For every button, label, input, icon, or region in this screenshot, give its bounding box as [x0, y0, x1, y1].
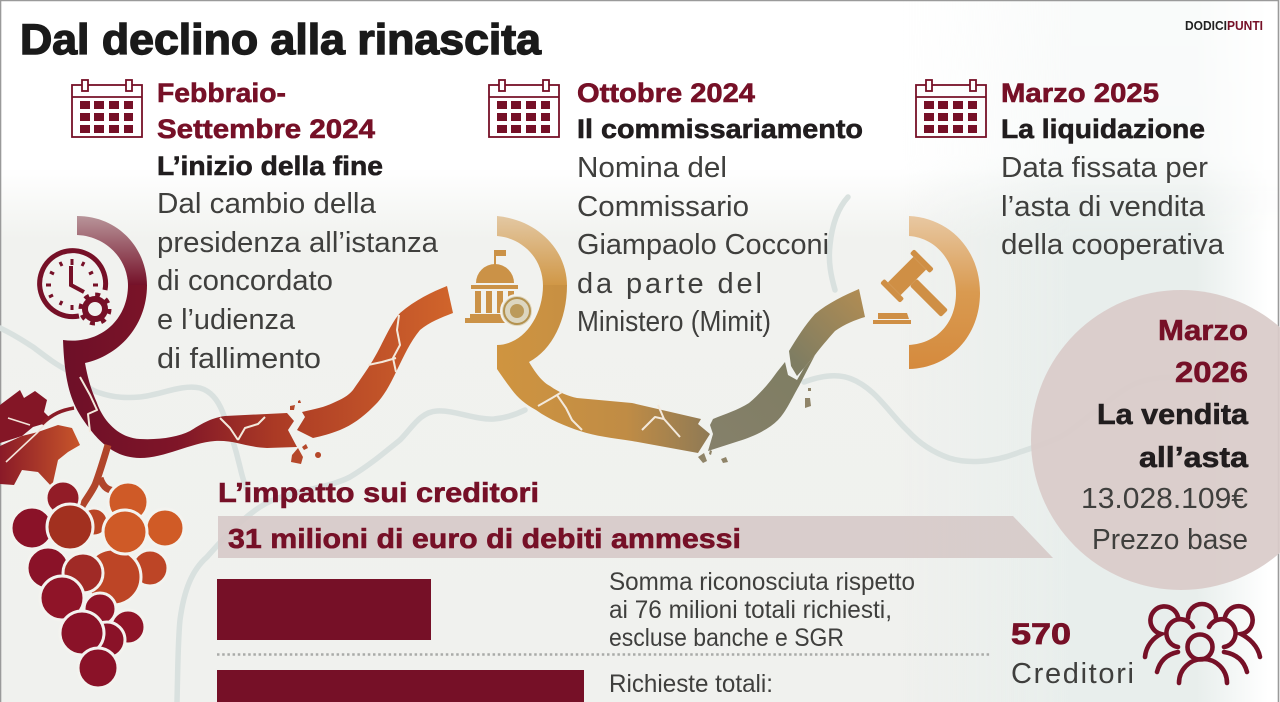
icon: calendar: [916, 80, 986, 137]
background river lines: [0, 197, 1177, 702]
step title: Il commissariamento: [577, 114, 863, 144]
timeline step 2: [489, 78, 863, 338]
timeline step 3: [916, 78, 1225, 261]
band: admitted debts: [218, 516, 1053, 558]
auction date: Marzo: [1158, 315, 1248, 347]
date heading: Febbraio-: [157, 78, 286, 108]
date heading second line: Settembre 2024: [157, 114, 375, 144]
step description: [577, 152, 829, 338]
icon: calendar: [72, 80, 142, 137]
auction title second line: all’asta: [1139, 442, 1249, 474]
bar note: total requests: Richieste totali:: [609, 670, 773, 698]
icon: calendar: [489, 80, 559, 137]
cracks: [538, 392, 680, 437]
step description: e l’udienza: [157, 304, 296, 336]
icon: auction gavel: [873, 249, 961, 330]
step description: della cooperativa: [1001, 229, 1225, 261]
date heading: Marzo 2025: [1001, 78, 1159, 108]
cracks: [80, 315, 400, 440]
bar note: recognised sum: [609, 568, 915, 652]
creditors label: Creditori: [1011, 658, 1134, 690]
step description: Ministero (Mimit): [577, 306, 771, 338]
step title: La liquidazione: [1001, 114, 1205, 144]
panel: auction circle: [1031, 290, 1280, 590]
auction year: 2026: [1175, 357, 1248, 389]
step description: presidenza all’istanza: [157, 227, 439, 259]
title: Dal declino alla rinascita: [20, 16, 542, 64]
panel: creditors count: [1011, 604, 1260, 690]
step description: Nomina del: [577, 152, 727, 184]
step description: da parte del: [577, 268, 762, 300]
bar note: recognised sum: Somma riconosciuta rispetto: [609, 568, 915, 596]
creditors number: 570: [1011, 618, 1071, 651]
icon: grape bunch: [11, 445, 184, 688]
debris: [290, 400, 321, 464]
bar note: recognised sum: ai 76 milioni totali richiesti,: [609, 596, 892, 624]
base price value: 13.028.109€: [1081, 483, 1248, 515]
base price label: Prezzo base: [1092, 524, 1248, 556]
broken ribbon: gold to grey: [497, 216, 865, 463]
panel: creditors impact: [217, 477, 1053, 702]
logo: DodiciPunti: DODICIPUNTI: [1185, 19, 1263, 33]
bar: recognised sum: [217, 579, 431, 640]
timeline step 1: [72, 78, 439, 375]
icon: vine leaves: [0, 390, 80, 487]
bar: total requests: [217, 670, 584, 702]
icon: ministry building and seal: [465, 250, 533, 327]
broken ribbon: burgundy to orange: [63, 216, 453, 464]
heading: L’impatto sui creditori: [218, 477, 539, 508]
step description: Commissario: [577, 191, 749, 223]
bar note: recognised sum: escluse banche e SGR: [609, 624, 844, 652]
ring: auction: [909, 216, 980, 369]
step description: [1001, 152, 1225, 261]
date heading: Ottobre 2024: [577, 78, 755, 108]
step description: Data fissata per: [1001, 152, 1208, 184]
step description: [157, 188, 439, 375]
band: admitted debts: 31 milioni di euro di debiti ammessi: [228, 523, 741, 554]
icon: group of people: [1145, 604, 1260, 683]
step description: di concordato: [157, 265, 333, 297]
step title: L’inizio della fine: [157, 151, 383, 181]
step description: di fallimento: [157, 343, 321, 375]
step description: Dal cambio della: [157, 188, 377, 220]
step description: Giampaolo Cocconi: [577, 229, 829, 261]
debris: [698, 388, 811, 463]
auction title: La vendita: [1097, 399, 1249, 431]
step description: l’asta di vendita: [1001, 191, 1206, 223]
icon: clock and gear: [40, 251, 112, 326]
